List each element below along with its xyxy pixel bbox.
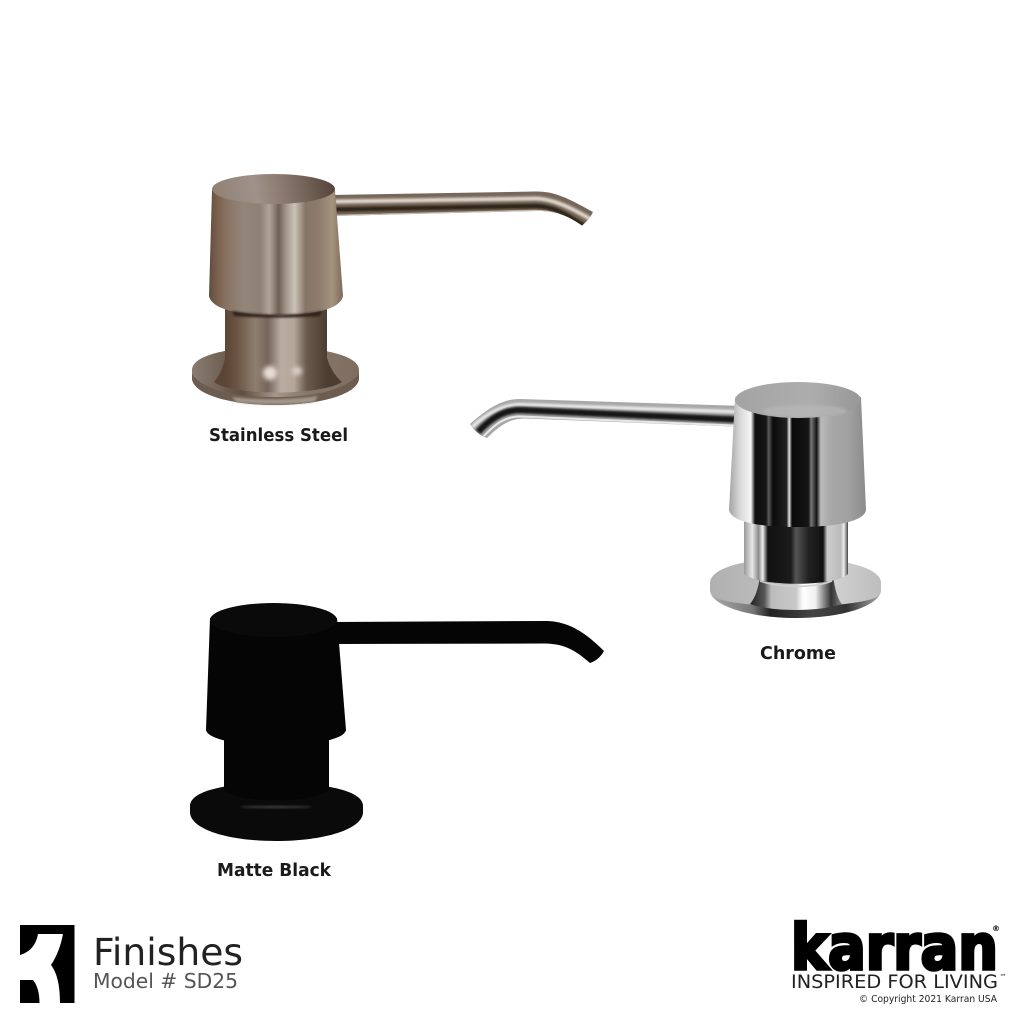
cap: [212, 174, 335, 204]
body: [209, 190, 343, 315]
body: [729, 397, 866, 527]
tagline: INSPIRED FOR LIVING: [791, 972, 998, 993]
neck: [225, 305, 327, 361]
cap highlight: [763, 405, 847, 417]
logo: karran: [791, 911, 1006, 1005]
subheading: model number: Model # SD25: [93, 969, 238, 993]
heading: finishes: Finishes: [93, 931, 243, 974]
flange rim: [192, 374, 359, 405]
trademark: ™: [1000, 973, 1006, 981]
label: chrome: Chrome: [760, 644, 836, 664]
base flare: [750, 576, 842, 610]
neck: [224, 735, 329, 800]
label: matte black: Matte Black: [217, 861, 331, 881]
neck lower line: [760, 581, 832, 586]
logo wordmark: karran: [791, 911, 998, 984]
neck: [744, 520, 848, 584]
cap: [210, 603, 337, 637]
base flange: [192, 347, 359, 405]
label: stainless steel: Stainless Steel: [209, 426, 348, 446]
shadow under body: [232, 311, 322, 318]
registered mark: ®: [992, 924, 1000, 933]
body: [206, 618, 346, 745]
base flange: [190, 783, 363, 841]
flare highlights: [263, 366, 302, 380]
base flange: [710, 558, 881, 618]
cap: [735, 382, 861, 418]
product: matte black soap dispenser: [190, 603, 604, 841]
product: stainless steel soap dispenser: [192, 174, 600, 405]
flange highlight: [240, 806, 312, 808]
base flare: [214, 358, 342, 392]
spout: [335, 621, 604, 663]
product: chrome soap dispenser: [465, 382, 881, 618]
base rim: [712, 596, 879, 618]
copyright: © Copyright 2021 Karran USA: [859, 994, 997, 1005]
spout: [470, 399, 734, 438]
spout: [335, 192, 593, 226]
rim highlight: [232, 396, 318, 404]
icon: karran k mark: [20, 925, 74, 1003]
